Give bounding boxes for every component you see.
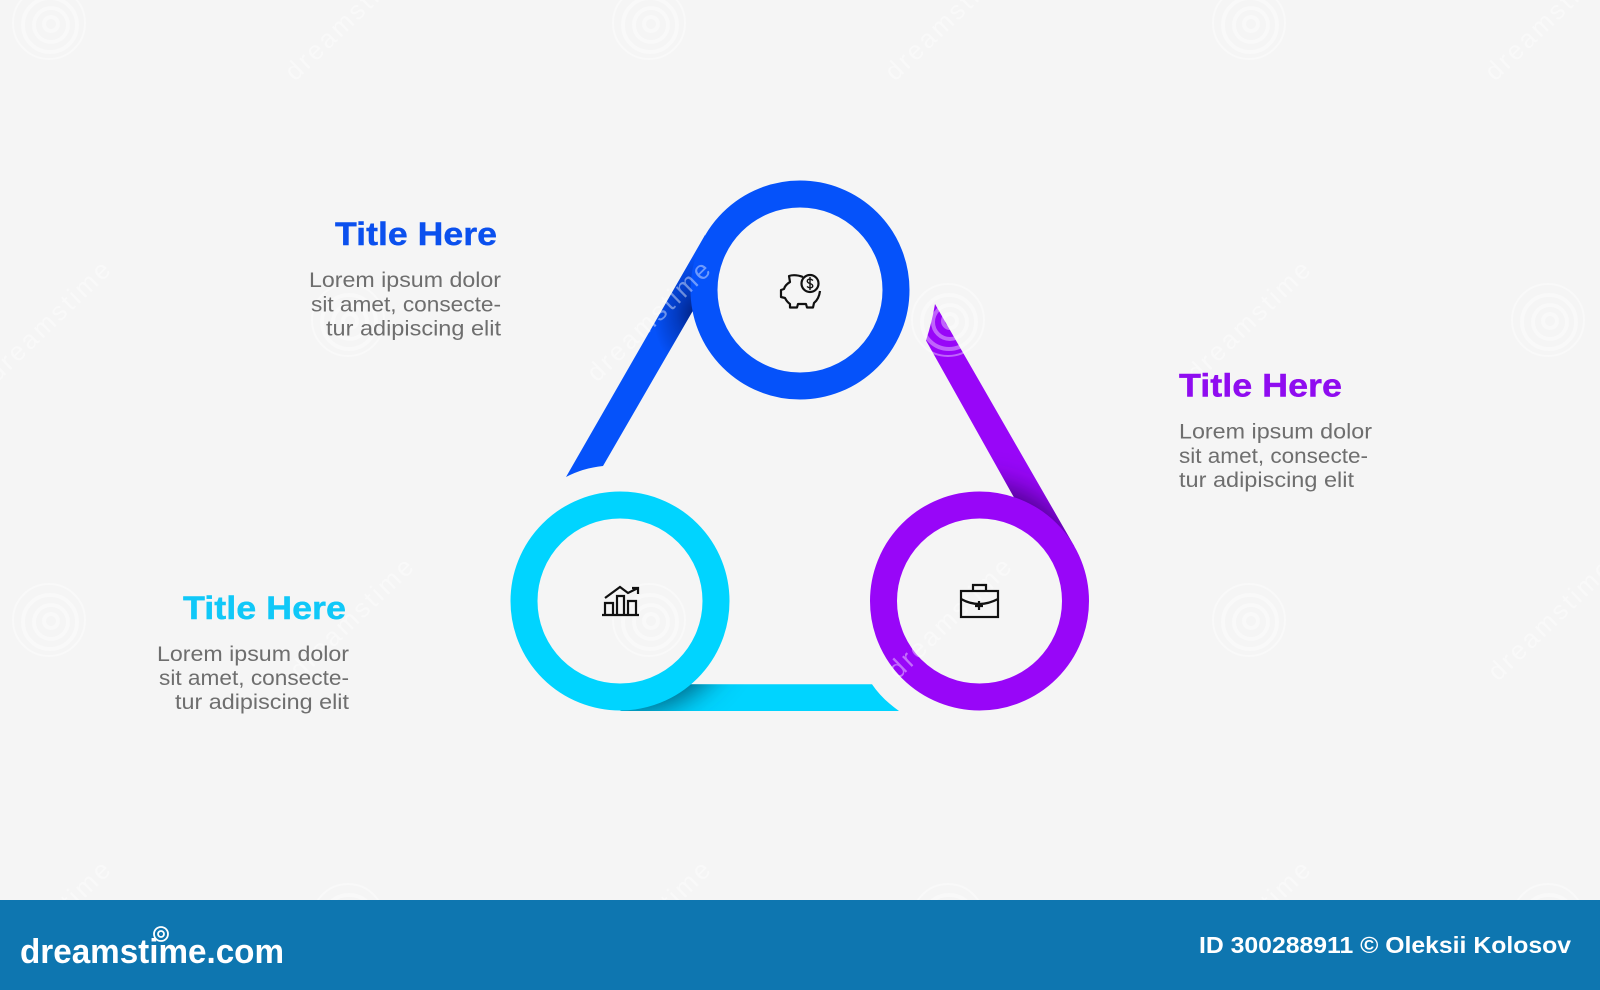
cyan body copy: tur adipiscing elit	[175, 691, 349, 714]
cyan body copy	[157, 643, 349, 714]
blue ribbon with piggy bank ring	[566, 194, 896, 477]
watermark pattern: dreamstime	[1180, 255, 1316, 387]
text block: purple	[1179, 368, 1372, 492]
heading: purple title: Title Here	[1179, 368, 1342, 404]
footer logo: dreamstime.com	[20, 933, 284, 971]
blue body copy: sit amet, consecte-	[311, 294, 501, 316]
footer bar	[0, 900, 1600, 990]
blue body copy: Lorem ipsum dolor	[309, 269, 501, 292]
icon: piggy bank	[781, 275, 820, 308]
watermark pattern: dreamstime	[881, 552, 1017, 684]
heading: cyan title: Title Here	[183, 590, 346, 626]
cyan ribbon with chart ring	[521, 494, 899, 712]
cyan body copy: sit amet, consecte-	[159, 667, 349, 690]
watermark pattern: dreamstime	[580, 255, 716, 387]
text block: blue	[309, 216, 501, 340]
blue body copy	[309, 269, 501, 340]
purple body copy: Lorem ipsum dolor	[1179, 420, 1372, 444]
purple body copy: sit amet, consecte-	[1179, 445, 1368, 468]
image credit: ID 300288911 © Oleksii Kolosov	[1199, 932, 1571, 958]
icon: briefcase	[961, 585, 998, 617]
watermark pattern: dreamstime	[580, 855, 716, 987]
purple body copy: tur adipiscing elit	[1179, 469, 1354, 492]
panel: cycle diagram	[521, 194, 1086, 712]
logo spiral	[154, 927, 168, 941]
blue body copy: tur adipiscing elit	[326, 318, 501, 340]
watermark pattern: dreamstime	[1180, 855, 1316, 987]
purple body copy	[1179, 420, 1372, 492]
text block: cyan	[157, 590, 349, 714]
purple ribbon with briefcase ring	[868, 304, 1086, 701]
cyan body copy: Lorem ipsum dolor	[157, 643, 349, 666]
icon: growth chart	[602, 587, 639, 615]
heading: blue title: Title Here	[335, 216, 497, 252]
watermark pattern: dreamstime	[283, 552, 419, 684]
